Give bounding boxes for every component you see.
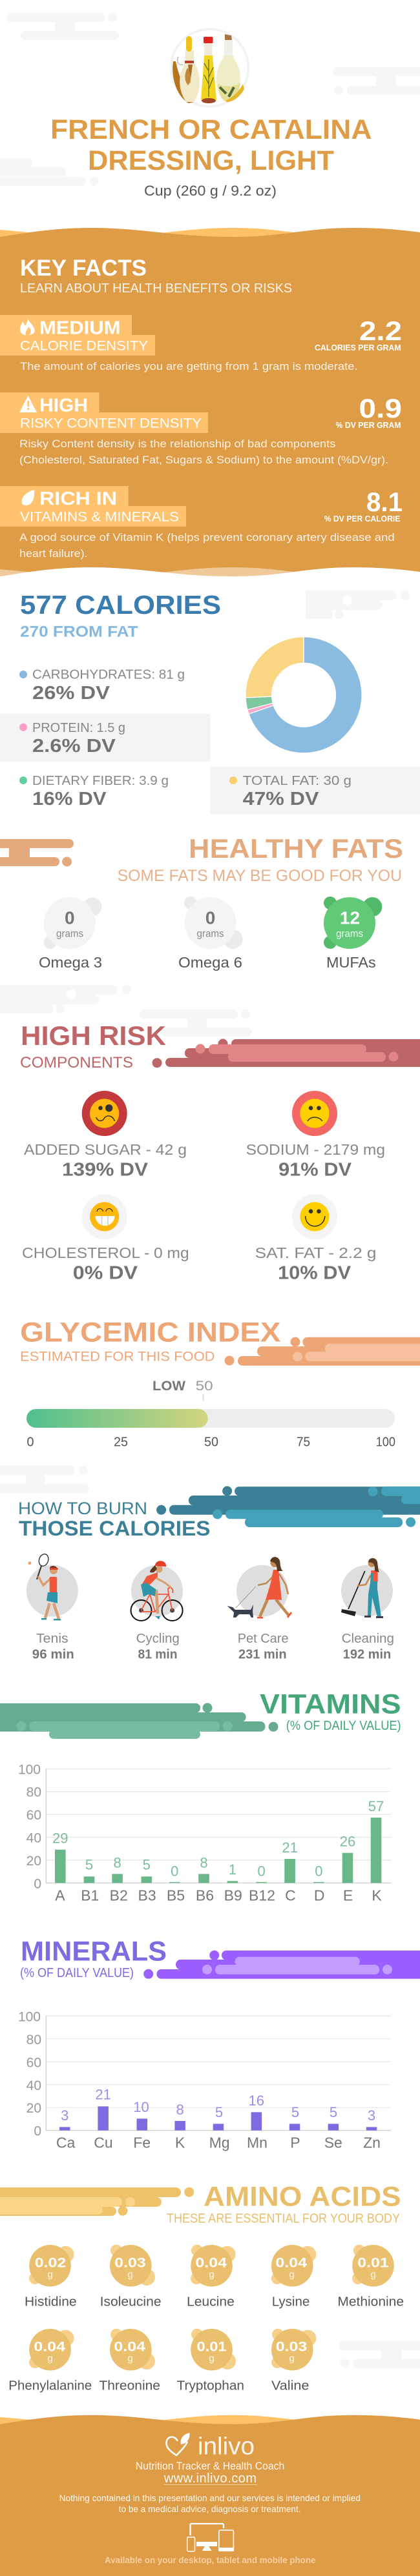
panel: vitamins [0,1689,401,1903]
bar chart: vitamins: 100 [18,1762,41,1777]
amino: methionine: Methionine [337,2295,404,2309]
amino: tryptophan: 0.01 [196,2340,227,2355]
bar chart: minerals: 40 [26,2078,41,2093]
legend: carbohydrates [19,668,185,704]
stat: omega 6: Omega 6 [178,954,242,971]
heading: glycemic index: ESTIMATED FOR THIS FOOD [20,1349,215,1364]
stat: omega 3: Omega 3 [39,954,102,971]
amino: lysine: g [289,2269,295,2280]
icon: grinning face [82,1194,127,1239]
tagline: Nutrition Tracker & Health Coach [136,2460,284,2472]
amino: lysine: 0.04 [275,2256,307,2271]
fact: rich in vitamins and minerals: A good source of Vitamin K (helps prevent coronary artery disease and [19,531,395,543]
bar chart: vitamins: 40 [26,1831,41,1846]
heading: amino acids: AMINO ACIDS [204,2182,401,2213]
heading: key facts: LEARN ABOUT HEALTH BENEFITS OR RISKS [20,281,292,296]
bar chart: minerals: Zn [363,2134,381,2151]
stat: saturated fat: 10% DV [278,1263,352,1284]
legend: protein: 2.6% DV [32,736,116,756]
panel: glycemic index [20,1317,420,1450]
bar chart: vitamins [18,1762,391,1903]
activity: pet care: Pet Care [238,1632,288,1646]
bar chart: vitamins: D [314,1887,325,1903]
activity: cleaning: Cleaning [342,1632,394,1646]
bar chart: minerals: 60 [26,2055,41,2070]
icon: warning triangle [19,396,37,412]
stat: saturated fat: SAT. FAT - 2.2 g [255,1244,376,1261]
heading: minerals: MINERALS [21,1936,167,1967]
bar chart: minerals: K [175,2134,185,2151]
stat: added sugar: ADDED SUGAR - 42 g [24,1141,187,1158]
amino: histidine: g [47,2269,53,2280]
bar chart: vitamins: 8 [200,1854,208,1871]
background cloud: left of title [0,158,99,186]
fact: risky content density: (Cholesterol, Saturated Fat, Sugars & Sodium) to the amount (%DV/gr). [19,454,388,466]
gauge value label: LOW [152,1379,185,1394]
fact: calorie density: CALORIE DENSITY [20,338,148,354]
bar chart: vitamins: B2 [110,1887,128,1903]
bar chart: vitamins: C [285,1887,296,1903]
gauge value label [152,1379,213,1401]
amino: leucine [187,2245,235,2309]
activity: cycling [131,1561,183,1661]
icon: devices [187,2524,234,2551]
icon: woman sweeping [341,1558,383,1618]
bar chart: minerals: Mg [209,2134,230,2151]
disclaimer: to be a medical advice, diagnosis or treatment. [119,2504,301,2514]
bar chart: minerals [18,2009,391,2151]
bar chart: minerals: 10 [133,2099,149,2115]
amino: leucine: g [209,2269,215,2280]
bar chart: minerals: 0 [34,2124,41,2139]
centre bottle [201,37,216,103]
fact: rich in vitamins and minerals: 8.1 [366,487,403,517]
heading: key facts [20,256,292,296]
left cruet bottle [173,36,200,103]
amino: histidine [25,2245,77,2309]
fact: rich in vitamins and minerals: % DV PER CALORIE [324,514,401,523]
fact: risky content density: 0.9 [359,393,402,423]
background cloud: amino acids [339,2341,420,2368]
fact: risky content density: HIGH [39,396,88,416]
bar chart: minerals: 3 [61,2107,68,2124]
bar chart: minerals: 5 [291,2104,299,2120]
bar chart: vitamins: A [55,1887,65,1903]
icon: smiling face [292,1194,337,1239]
heading: amino acids: THESE ARE ESSENTIAL FOR YOUR BODY [167,2211,400,2226]
bar chart: vitamins: B6 [196,1887,214,1903]
amino: phenylalanine: 0.04 [34,2340,65,2355]
bar chart: minerals: 5 [330,2104,337,2120]
background cloud: calories [306,591,410,619]
decoration: glycemic band [225,1337,420,1366]
amino: tryptophan: g [209,2353,215,2364]
panel: key facts [0,228,420,587]
bar chart: minerals: 100 [18,2009,41,2024]
activity: cleaning: 192 min [343,1647,391,1661]
activity: pet care: 231 min [238,1647,287,1661]
stat: added sugar: 139% DV [62,1160,149,1181]
fact: rich in vitamins and minerals [0,486,403,560]
stat: MUFAs: grams [336,929,363,940]
right bottle [216,34,244,102]
bar chart: minerals: Se [324,2134,342,2151]
panel: footer [0,2415,420,2576]
serving size: Cup (260 g / 9.2 oz) [144,183,277,199]
amino: leucine: Leucine [187,2295,235,2309]
amino: tryptophan: Tryptophan [177,2379,244,2393]
gauge scale [27,1435,395,1450]
bar chart: minerals: 16 [249,2093,264,2109]
title [50,114,372,176]
gauge value label: 50 [196,1379,213,1394]
fact: rich in vitamins and minerals: VITAMINS & MINERALS [20,509,179,525]
stat: cholesterol: 0% DV [73,1263,138,1284]
stat: MUFAs: 12 [340,908,360,928]
icon: tennis player [28,1553,61,1620]
amino: lysine: Lysine [272,2295,310,2309]
amino: leucine: 0.04 [195,2256,227,2271]
amino: histidine: Histidine [25,2295,77,2309]
bar chart: vitamins: 0 [315,1863,323,1880]
bar chart: vitamins: 1 [229,1861,236,1878]
amino: isoleucine: g [127,2269,133,2280]
icon: woman walking a dog [227,1557,292,1619]
legend: dietary fiber: DIETARY FIBER: 3.9 g [32,774,169,788]
panel: high risk [20,1020,420,1284]
activity: cycling: Cycling [136,1632,180,1646]
panel: minerals [18,1936,420,2151]
background cloud: top left [6,13,119,40]
stat: sodium [246,1091,385,1181]
gauge scale: 100 [376,1435,395,1450]
legend: carbohydrates: CARBOHYDRATES: 81 g [32,668,185,682]
amino: threonine: g [127,2353,133,2364]
bar chart: minerals: 3 [368,2107,375,2124]
bar chart: minerals: 5 [215,2104,223,2120]
icon: sad face [292,1091,337,1136]
fact: risky content density: % DV PER GRAM [336,420,401,430]
bar chart: vitamins: 29 [52,1831,68,1847]
amino: valine: 0.03 [276,2340,307,2355]
fact: calorie density: The amount of calories you are getting from 1 gram is moderate. [20,360,358,372]
amino: phenylalanine: g [47,2353,53,2364]
stat: MUFAs [324,897,382,971]
bar chart: minerals: 21 [95,2087,111,2103]
gauge scale: 0 [27,1435,34,1450]
fact: risky content density: Risky Content density is the relationship of bad components [19,438,336,450]
bar chart: vitamins: 20 [26,1854,41,1869]
panel: calories [0,590,420,815]
donut chart [246,637,362,753]
amino: lysine [271,2245,316,2309]
stat: omega 6: 0 [205,908,215,928]
amino: methionine [337,2245,404,2309]
background clouds: high risk [0,985,252,1037]
amino: threonine [99,2329,160,2393]
fact: risky content density [0,392,402,466]
stat: saturated fat [255,1194,376,1284]
bar chart: minerals: 80 [26,2033,41,2047]
panel: amino acids [0,2182,404,2393]
amino: valine: g [289,2353,295,2364]
stat: omega 6: grams [196,929,224,940]
bar chart: vitamins: 57 [368,1798,384,1814]
amino: phenylalanine: Phenylalanine [8,2379,92,2393]
disclaimer [59,2493,361,2514]
amino: valine: Valine [271,2379,309,2393]
fact: rich in vitamins and minerals: heart failure). [19,547,88,560]
bar chart: vitamins: 60 [26,1808,41,1823]
activity: tennis: 96 min [32,1647,74,1661]
stat: omega 3: 0 [65,908,75,928]
heading: calories: 270 FROM FAT [20,624,138,641]
availability note: Available on your desktop, tablet and mobile phone [105,2555,316,2565]
bar chart: vitamins: 80 [26,1785,41,1800]
panel: healthy fats [0,833,403,971]
heading: amino acids [167,2182,401,2226]
bar chart: vitamins: 21 [282,1840,298,1856]
bar chart: minerals: 20 [26,2101,41,2116]
stat: sodium: 91% DV [278,1160,352,1181]
legend: total fat: 47% DV [243,789,319,809]
decoration: healthy fats band [0,839,74,866]
fact: calorie density: 2.2 [359,316,402,346]
bar chart: vitamins: 26 [340,1834,355,1850]
bar chart: vitamins: 5 [85,1857,93,1873]
decoration: high risk band [152,1039,420,1068]
icon: flame [20,318,35,335]
amino: isoleucine: 0.03 [114,2256,146,2271]
bar chart: minerals: Cu [94,2134,113,2151]
heading: how to burn: HOW TO BURN [18,1499,147,1518]
heading: healthy fats: SOME FATS MAY BE GOOD FOR YOU [118,867,402,885]
icon: sick face [82,1091,127,1136]
website link: www.inlivo.com [163,2471,257,2486]
activity: cycling: 81 min [138,1647,177,1661]
stat: omega 6 [178,897,243,971]
amino: threonine: 0.04 [114,2340,145,2355]
bar chart: vitamins: E [343,1887,353,1903]
gauge scale: 50 [204,1435,218,1450]
amino: tryptophan [177,2329,244,2393]
heading: high risk: HIGH RISK [21,1020,166,1051]
legend: protein: PROTEIN: 1.5 g [32,721,125,735]
gauge bar [26,1409,395,1428]
bar chart: minerals: Mn [247,2134,268,2151]
title: DRESSING, LIGHT [88,145,334,176]
title: FRENCH OR CATALINA [50,114,372,145]
fact: calorie density [0,315,402,372]
background cloud: burn [0,1466,89,1493]
decoration: amino band [0,2187,194,2216]
stat: added sugar [24,1091,187,1181]
heading: high risk [20,1020,166,1071]
legend: dietary fiber: 16% DV [32,789,107,809]
bar chart: vitamins: B3 [138,1887,156,1903]
food image: bottles in a circle [170,28,249,108]
amino: isoleucine [100,2245,162,2309]
amino: valine [271,2329,316,2393]
activity: pet care [227,1557,292,1661]
bar chart: minerals: Ca [56,2134,76,2151]
heading: how to burn: THOSE CALORIES [19,1517,211,1540]
fact: calorie density: CALORIES PER GRAM [315,343,401,352]
heading: key facts: KEY FACTS [20,256,147,281]
heading: calories [20,590,221,641]
bar chart: vitamins: 0 [34,1876,41,1891]
decoration: minerals band [143,1951,420,1979]
heading: minerals [20,1936,167,1980]
panel: how to burn those calories [18,1486,420,1661]
stat: MUFAs: MUFAs [326,954,376,971]
amino: histidine: 0.02 [35,2256,66,2271]
stat: omega 3 [39,897,102,971]
heading: glycemic index [20,1317,281,1364]
stat: sodium: SODIUM - 2179 mg [246,1141,385,1158]
amino: threonine: Threonine [99,2379,160,2393]
bar chart: vitamins: B9 [224,1887,242,1903]
bar chart: vitamins: K [372,1887,382,1903]
stat: omega 3: grams [56,929,83,940]
legend: total fat [210,767,420,815]
fact: calorie density: MEDIUM [39,318,120,339]
heading: healthy fats [118,833,403,885]
decoration: burn band [156,1486,420,1527]
icon: cyclist [131,1561,183,1621]
heading: vitamins: VITAMINS [260,1689,401,1719]
legend: protein [0,714,211,762]
bar chart: minerals: 8 [176,2102,184,2118]
bar chart: vitamins: B1 [81,1887,99,1903]
amino: methionine: 0.01 [357,2256,389,2271]
amino: phenylalanine [8,2329,92,2393]
fact: risky content density: RISKY CONTENT DENSITY [20,416,202,431]
icon: leaf [22,490,34,505]
gauge scale: 75 [297,1435,310,1450]
legend: carbohydrates: 26% DV [32,683,110,704]
legend: total fat: TOTAL FAT: 30 g [243,774,352,788]
activity: tennis [26,1553,78,1661]
activity: cleaning [341,1558,394,1661]
decoration: vitamins band [0,1703,278,1739]
bar chart: vitamins: 0 [257,1863,266,1880]
bar chart: vitamins: 5 [143,1857,151,1873]
heading: glycemic index: GLYCEMIC INDEX [20,1317,281,1348]
amino: isoleucine: Isoleucine [100,2295,162,2309]
disclaimer: Nothing contained in this presentation and our services is intended or implied [59,2493,361,2503]
amino: methionine: g [370,2269,376,2280]
heading: minerals: (% OF DAILY VALUE) [20,1966,134,1980]
background cloud: top right [333,67,420,94]
heading: how to burn [18,1499,211,1540]
bar chart: minerals: Fe [133,2134,151,2151]
heading: vitamins [260,1689,401,1733]
activity: tennis: Tenis [36,1632,68,1646]
bar chart: vitamins: B5 [167,1887,185,1903]
stat: cholesterol [22,1194,189,1284]
fact: rich in vitamins and minerals: RICH IN [39,489,117,509]
heading: calories: 577 CALORIES [20,590,221,620]
bar chart: minerals: P [290,2134,300,2151]
legend: dietary fiber [19,774,169,809]
gauge scale: 25 [114,1435,128,1450]
stat: cholesterol: CHOLESTEROL - 0 mg [22,1244,189,1261]
bar chart: vitamins: B12 [249,1887,275,1903]
heading: healthy fats: HEALTHY FATS [189,833,403,864]
logo: inlivo [166,2433,255,2460]
bar chart: vitamins: 8 [113,1854,121,1871]
bar chart: vitamins: 0 [171,1863,178,1880]
logo: inlivo: inlivo [198,2433,255,2460]
heading: vitamins: (% OF DAILY VALUE) [286,1719,401,1733]
heading: high risk: COMPONENTS [20,1054,133,1071]
